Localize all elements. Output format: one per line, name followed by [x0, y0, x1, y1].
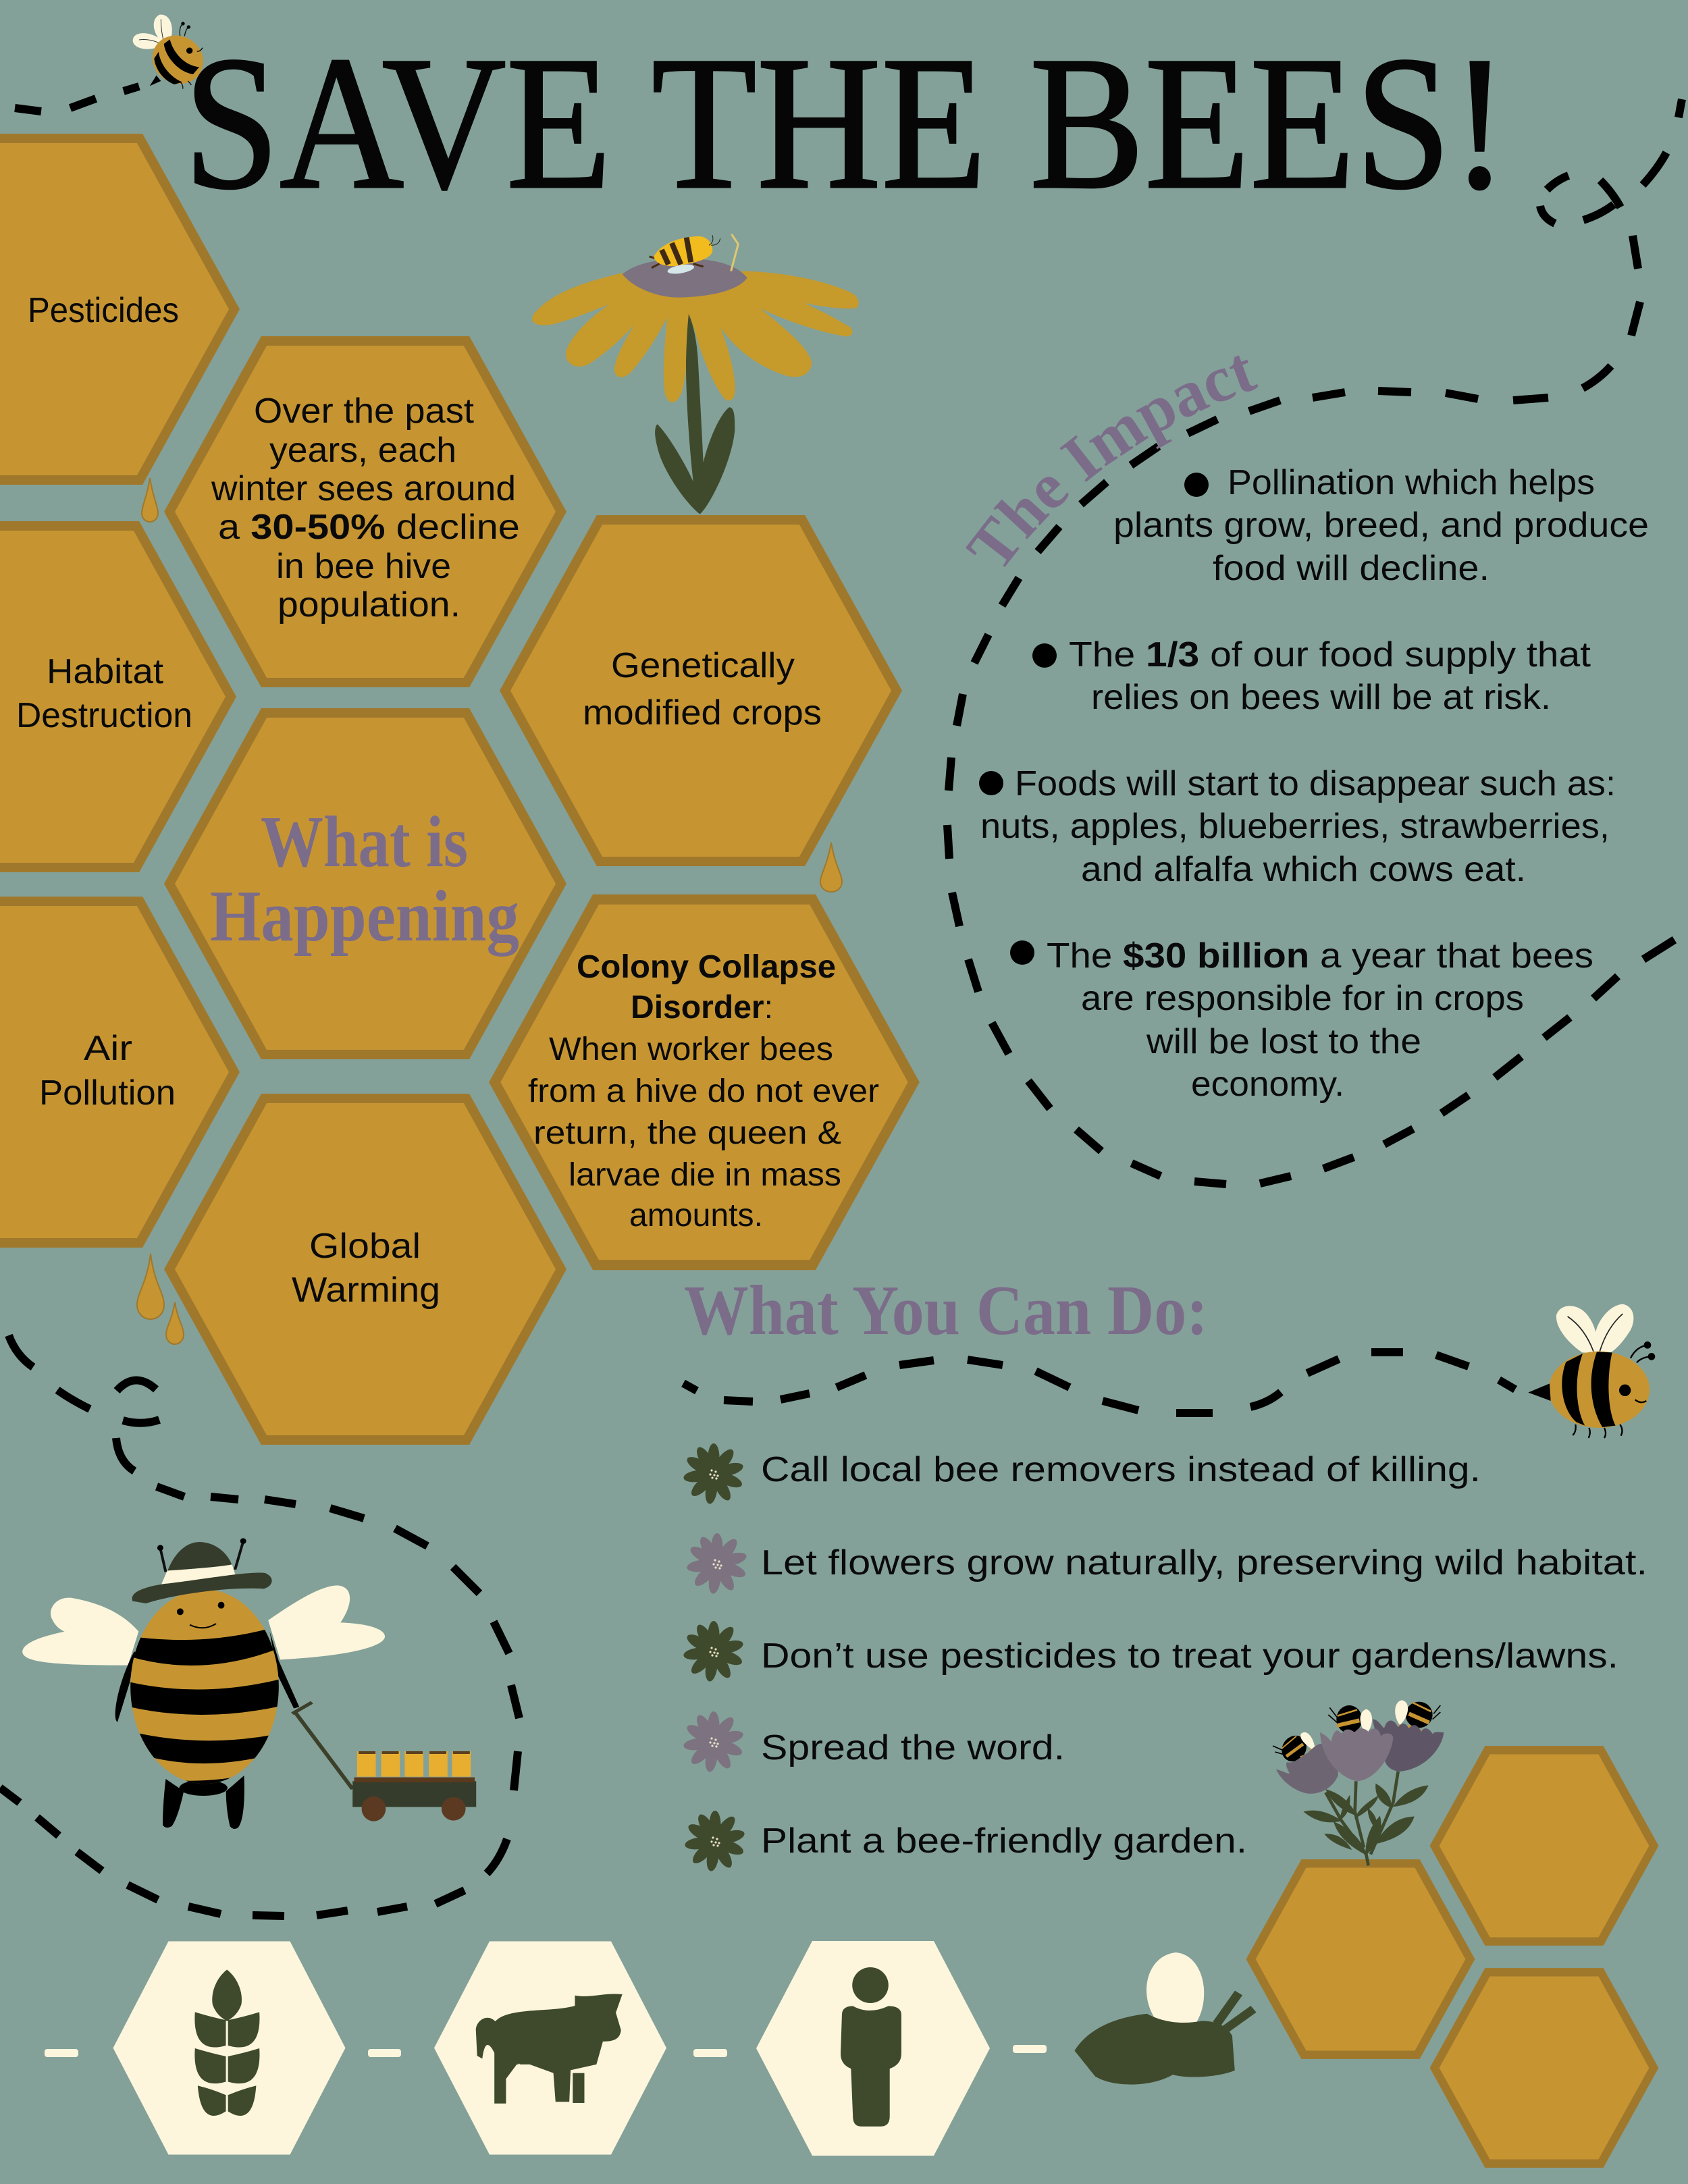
item: let flowers grow: [686, 1533, 1647, 1595]
text: pesticides: Pesticides: [28, 291, 179, 330]
bullet: foods disappear: and alfalfa which cows eat.: [1081, 850, 1526, 889]
title: SAVE THE BEES!: [184, 18, 1508, 229]
item: call bee removers: Call local bee removers instead of killing.: [761, 1450, 1481, 1489]
text: decline statistic: [211, 392, 520, 624]
icon: purple flowers with bees: [1273, 1700, 1444, 1865]
icon: three bees: [1273, 1700, 1440, 1770]
item: no pesticides: [683, 1621, 1618, 1682]
text: global warming: [292, 1227, 440, 1310]
heading: what is happening: [210, 802, 519, 957]
icon: bee at wave: [1528, 1304, 1655, 1438]
text: colony collapse disorder: amounts.: [629, 1198, 763, 1233]
text: habitat destruction: Habitat: [47, 652, 164, 691]
panel: air pollution: [0, 901, 234, 1243]
icon: stem and leaves: [655, 314, 735, 514]
icon: face: [177, 1602, 224, 1628]
text: colony collapse disorder: When worker bees: [549, 1032, 833, 1067]
bullet: food supply: [1032, 635, 1591, 717]
text: habitat destruction: Destruction: [16, 696, 192, 735]
icon: legs and arms: [115, 1632, 299, 1829]
text: colony collapse disorder: Disorder:: [631, 990, 773, 1026]
icon: wagon: [292, 1703, 476, 1821]
icon: yellow flower with bee: [533, 234, 858, 514]
dashed flight path: wave: [683, 1352, 1515, 1413]
bullet: foods disappear: nuts, apples, blueberries, strawberries,: [980, 807, 1610, 846]
bullet: economy: are responsible for in crops: [1081, 979, 1524, 1018]
icon: sleeping bee: [650, 234, 738, 275]
bullet: foods disappear: Foods will start to disappear such as:: [1015, 764, 1616, 803]
item: plant a garden: Plant a bee-friendly garden.: [761, 1821, 1247, 1861]
icon: wings: [22, 1585, 385, 1666]
text: colony collapse disorder: Colony Collapse: [577, 949, 836, 985]
text: decline statistic: Over the past: [254, 392, 475, 431]
bullet: pollination: food will decline.: [1213, 549, 1489, 588]
icon: stems and leaves: [1305, 1772, 1427, 1865]
text: decline statistic: years, each: [269, 431, 456, 470]
heading: the impact: The Impact: [966, 355, 1259, 567]
dash: food chain: [45, 2049, 78, 2057]
text: colony collapse disorder: return, the queen &: [533, 1115, 841, 1151]
item: spread the word: Spread the word.: [761, 1728, 1065, 1767]
bullet: food supply: The 1/3 of our food supply that: [1069, 635, 1591, 674]
bullet: economy: will be lost to the: [1146, 1022, 1421, 1061]
dash: food chain: [1013, 2045, 1047, 2053]
icon: bee silhouette: [1074, 1952, 1254, 2085]
bullet: pollination: plants grow, breed, and produce: [1113, 506, 1649, 545]
panel: genetically modified crops: [505, 520, 897, 861]
dashed flight path: lower left: [0, 1335, 519, 1916]
bullet: foods disappear: [979, 764, 1616, 889]
panel: action list: [683, 1443, 1647, 1872]
panel: global warming: [169, 1098, 561, 1440]
dashed flight path: impact loop: [947, 99, 1682, 1184]
panel: pesticides: [0, 138, 234, 480]
text: genetically modified crops: [583, 646, 822, 733]
item: call bee removers: [683, 1443, 1481, 1505]
panel: what is happening: [169, 713, 561, 1055]
icon: cow: [476, 1994, 623, 2104]
panel: person: [756, 1941, 990, 2156]
text: colony collapse disorder: [528, 949, 879, 1233]
panel: cow: [434, 1942, 666, 2155]
panel: habitat destruction: [0, 526, 231, 868]
text: global warming: Global: [309, 1227, 421, 1266]
text: global warming: Warming: [292, 1271, 440, 1310]
item: spread the word: [683, 1711, 1065, 1773]
icon: stripes: [130, 1630, 279, 1784]
heading: what is happening: What is: [261, 802, 468, 882]
panel: impact list: [979, 463, 1649, 1104]
bullet: economy: The $30 billion a year that bees: [1047, 936, 1593, 976]
bullet: economy: [1010, 936, 1593, 1104]
icon: bee at title: [133, 15, 212, 93]
text: decline statistic: population.: [278, 585, 460, 624]
panel: decline statistic: [169, 341, 561, 683]
text: air pollution: Pollution: [39, 1073, 176, 1113]
text: colony collapse disorder: larvae die in mass: [569, 1157, 841, 1193]
text: colony collapse disorder: from a hive do not ever: [528, 1073, 879, 1109]
text: decline statistic: winter sees around: [211, 469, 516, 508]
icon: flower heads: [1276, 1720, 1444, 1794]
item: no pesticides: Don’t use pesticides to treat your gardens/lawns.: [761, 1636, 1618, 1676]
text: habitat destruction: [16, 652, 192, 735]
icon: plant: [196, 1971, 259, 2114]
bullet: pollination: Pollination which helps: [1228, 463, 1595, 502]
text: air pollution: [39, 1029, 176, 1113]
bullet: economy: economy.: [1191, 1065, 1344, 1104]
heading: what you can do: What You Can Do:: [684, 1271, 1208, 1350]
icon: body: [130, 1589, 279, 1784]
icon: disc: [623, 259, 747, 298]
text: decline statistic: a 30-50% decline: [218, 508, 520, 547]
dash: food chain: [693, 2049, 727, 2057]
panel: empty honeycomb cells: [1251, 1750, 1654, 2164]
item: plant a garden: [684, 1811, 1247, 1872]
text: genetically modified crops: Genetically: [611, 646, 795, 685]
icon: bee with hat and wagon: [22, 1538, 476, 1829]
icon: person: [841, 1967, 901, 2127]
item: let flowers grow: Let flowers grow naturally, preserving wild habitat.: [761, 1543, 1647, 1582]
icon: hat: [132, 1538, 272, 1603]
dashed flight path: top left: [15, 86, 139, 111]
bullet: food supply: relies on bees will be at risk.: [1091, 678, 1551, 717]
icon: petals: [533, 272, 858, 401]
text: genetically modified crops: modified crops: [583, 693, 822, 733]
text: air pollution: Air: [84, 1029, 132, 1068]
dash: food chain: [368, 2049, 401, 2057]
icon: honey drops: [137, 1254, 184, 1344]
icon: honey drop: [142, 478, 158, 522]
heading: what is happening: Happening: [210, 876, 519, 957]
panel: plant: [113, 1942, 346, 2155]
icon: honey drop: [820, 843, 842, 892]
text: decline statistic: in bee hive: [276, 547, 451, 586]
panel: colony collapse disorder: [495, 899, 914, 1265]
bullet: pollination: [1113, 463, 1649, 588]
